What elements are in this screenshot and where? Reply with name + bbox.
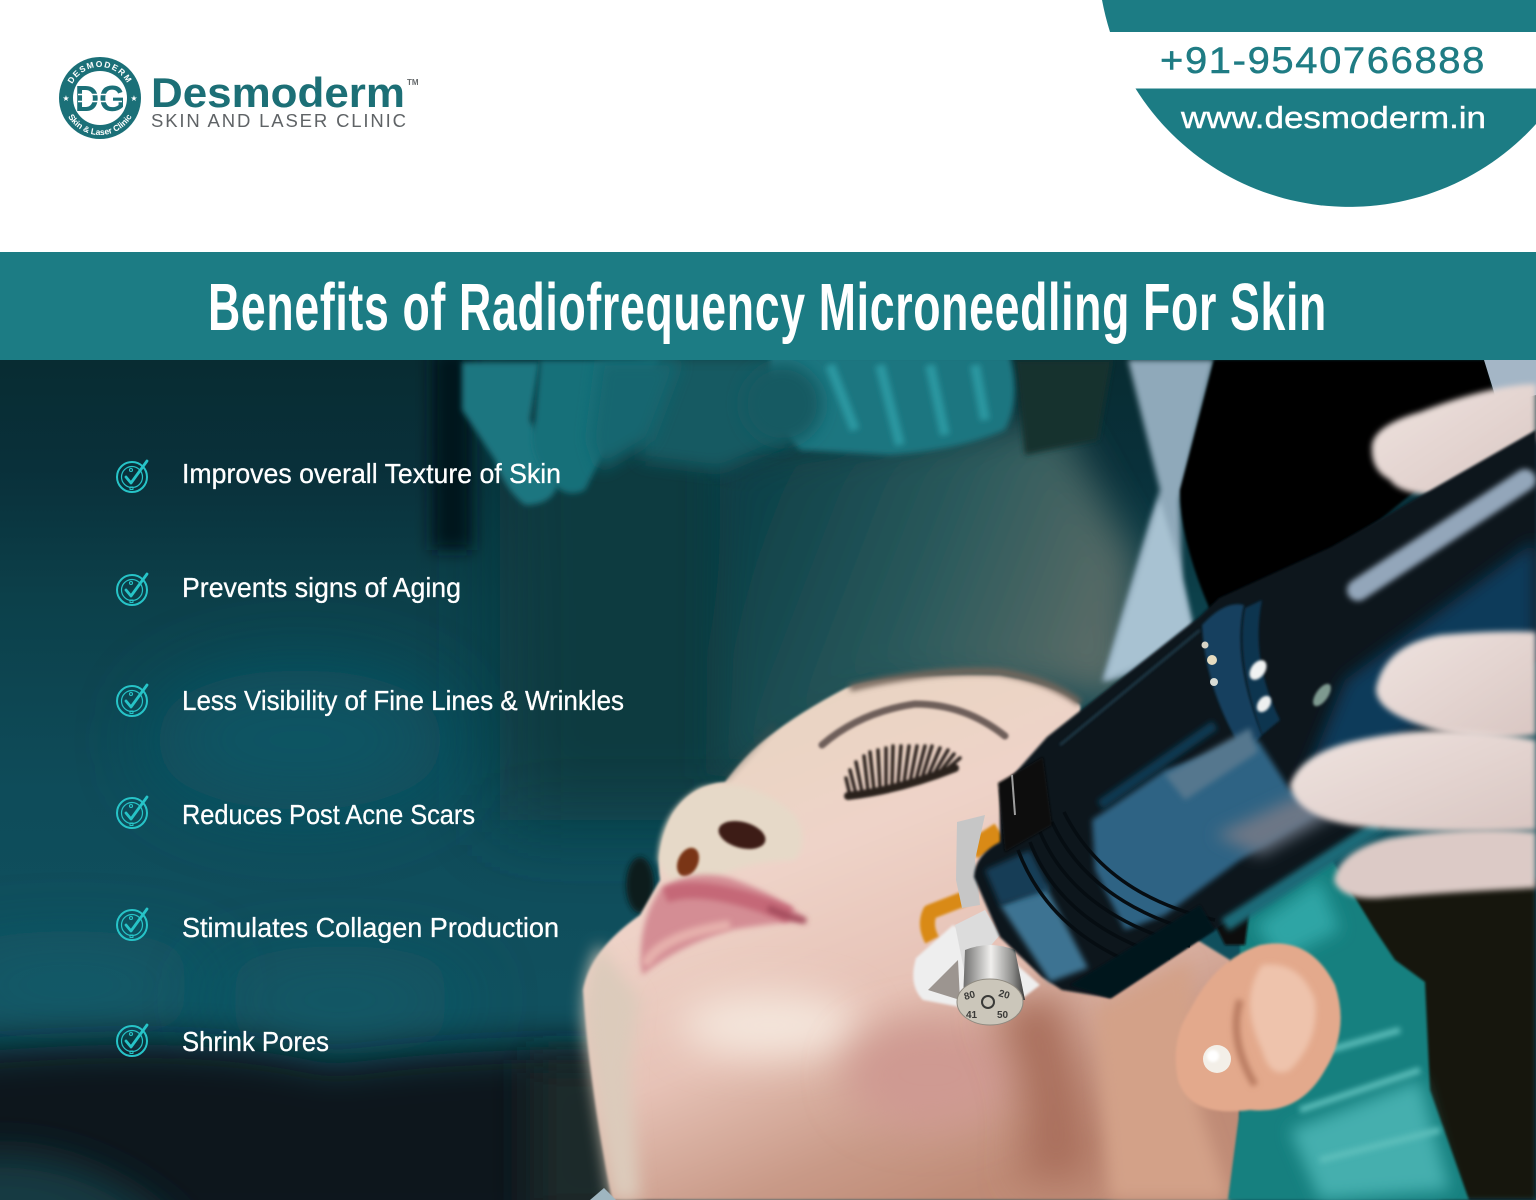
device metal tip: 50 bbox=[997, 1010, 1009, 1021]
background: white header bbox=[0, 0, 1536, 252]
mouth corner bbox=[768, 908, 806, 921]
lower dark edge bbox=[1070, 905, 1215, 998]
device metal tip: 20 bbox=[997, 988, 1011, 1002]
phone number: +91-9540766888 bbox=[1160, 40, 1486, 81]
benefit: acne scars: Reduces Post Acne Scars bbox=[182, 799, 475, 830]
coat corner, top right bbox=[1484, 360, 1536, 405]
skin highlight bbox=[680, 993, 860, 1057]
logo emblem: Skin & Laser Clinic bbox=[68, 114, 132, 135]
barrel grooves bbox=[1018, 812, 1215, 970]
orange flex ribbon bbox=[927, 898, 966, 940]
deep blue body sheen bbox=[1300, 540, 1536, 790]
device metal tip bbox=[913, 815, 1040, 1025]
silver strap bbox=[956, 815, 985, 908]
logo trademark: TM bbox=[407, 78, 419, 87]
benefit: fine lines: Less Visibility of Fine Lines & Wrinkles bbox=[182, 685, 624, 716]
light blue panel bbox=[1092, 740, 1340, 930]
body edge sheen bbox=[1060, 630, 1200, 745]
website panel bbox=[1136, 88, 1536, 207]
metal cylinder bbox=[963, 945, 1025, 1000]
logo emblem: ★ bbox=[130, 94, 138, 103]
logo emblem: ★ bbox=[62, 94, 70, 103]
blurred wall behind patient bbox=[720, 420, 1135, 780]
eyebrow bbox=[822, 704, 1005, 745]
blurred left background bbox=[0, 350, 840, 1200]
benefits list bbox=[117, 458, 624, 1057]
logo emblem bbox=[59, 57, 141, 139]
logo wordmark: Desmoderm bbox=[151, 69, 405, 116]
device metal tip: 80 bbox=[963, 989, 977, 1003]
white coat bbox=[1102, 360, 1214, 682]
logo emblem: DG bbox=[75, 78, 125, 119]
benefit: pores: Shrink Pores bbox=[182, 1026, 329, 1057]
title banner bbox=[0, 252, 1536, 360]
gloved finger, top bbox=[1372, 384, 1536, 495]
white frame bbox=[913, 925, 1040, 1008]
patient face bbox=[583, 671, 1240, 1200]
website url: www.desmoderm.in bbox=[1180, 100, 1486, 135]
device metal tip: 41 bbox=[966, 1010, 978, 1021]
benefit: aging: Prevents signs of Aging bbox=[182, 572, 461, 603]
contact block: top right bbox=[1102, 0, 1536, 207]
ear with pearl earring bbox=[1176, 943, 1341, 1111]
lips bbox=[641, 875, 806, 975]
hairline bbox=[850, 671, 1080, 703]
teal reflection strip bbox=[1225, 825, 1380, 925]
hair net bbox=[1215, 860, 1469, 1200]
front barrel sheen bbox=[1000, 885, 1088, 982]
eyelashes bbox=[846, 746, 960, 796]
handpiece body bbox=[974, 430, 1536, 998]
blue gown corner bbox=[590, 1188, 616, 1200]
photo panel: RF microneedling treatment bbox=[0, 360, 1536, 1200]
gloved hand, top bbox=[462, 355, 1015, 505]
logo tagline: SKIN AND LASER CLINIC bbox=[151, 110, 406, 131]
display strip highlight bbox=[1358, 480, 1525, 590]
cylinder end disc with needle depth labels bbox=[957, 979, 1023, 1025]
collar bbox=[1202, 604, 1262, 755]
gloved fingers, lower bbox=[1290, 631, 1536, 898]
black clip bbox=[998, 757, 1052, 852]
hair behind ear bbox=[1215, 905, 1250, 945]
benefit: collagen: Stimulates Collagen Production bbox=[182, 912, 559, 943]
dark operator clothing bbox=[1180, 360, 1500, 620]
logo: Desmoderm Skin and Laser Clinic bbox=[59, 57, 419, 139]
contact top arc bbox=[1102, 0, 1536, 32]
logo emblem: DESMODERM bbox=[68, 61, 132, 84]
flushed cheek bbox=[845, 1020, 1015, 1130]
pale jaw edge bbox=[584, 945, 640, 1200]
nose bbox=[658, 785, 802, 886]
dark clothing, bottom right bbox=[1330, 880, 1536, 1200]
dark box above wall bbox=[1015, 360, 1112, 455]
benefit: texture: Improves overall Texture of Skin bbox=[182, 458, 561, 489]
neck shadow under device bbox=[990, 990, 1090, 1180]
benefit: pores bbox=[117, 1025, 329, 1057]
collar reflections bbox=[1202, 642, 1208, 648]
